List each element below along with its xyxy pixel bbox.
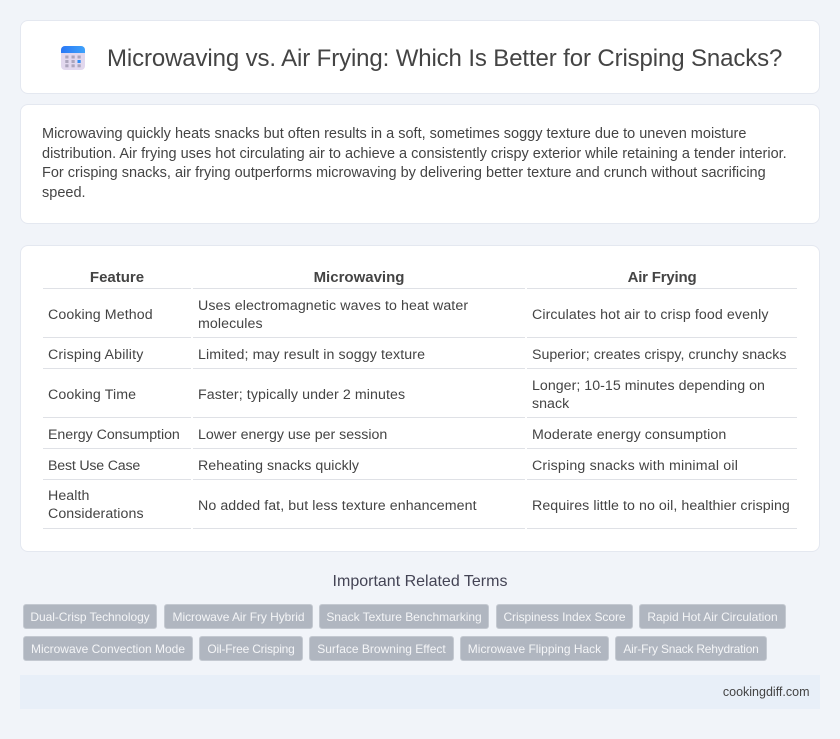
panel: title header: [20, 20, 820, 94]
text: Lower energy use per session: [198, 427, 387, 443]
text: Health: [48, 488, 89, 504]
text: Requires little to no oil, healthier crisping: [532, 498, 790, 514]
text block: description: For crisping snacks, air frying outperforms microwaving by delivering better texture and crunch without sacrificing: [42, 165, 766, 181]
text: Best Use Case: [48, 458, 140, 474]
text: Energy Consumption: [48, 427, 180, 443]
text: Reheating snacks quickly: [198, 458, 359, 474]
text: molecules: [198, 316, 263, 332]
row: Best Use Case: [48, 458, 738, 474]
text: Cooking Method: [48, 307, 153, 323]
text: Oil-Free Crisping: [207, 642, 295, 656]
text: Microwave Flipping Hack: [468, 642, 601, 656]
text: Air-Fry Snack Rehydration: [623, 642, 759, 656]
text: Rapid Hot Air Circulation: [647, 610, 778, 624]
text: Uses electromagnetic waves to heat water: [198, 298, 468, 314]
text: No added fat, but less texture enhancement: [198, 498, 477, 514]
table header: Feature: Feature: [90, 269, 144, 286]
text: Dual-Crisp Technology: [30, 610, 150, 624]
text block: description: distribution. Air frying uses hot circulating air to achieve a consistently crispy exterior while retaining a tender interior.: [42, 146, 787, 162]
text: Crisping Ability: [48, 347, 143, 363]
text: Considerations: [48, 506, 144, 522]
icon: calendar: [61, 46, 85, 70]
text: snack: [532, 396, 569, 412]
text: Crisping snacks with minimal oil: [532, 458, 738, 474]
footer bar: [20, 675, 820, 709]
row: Cooking Time: [48, 378, 765, 412]
text: Snack Texture Benchmarking: [326, 610, 482, 624]
text: Faster; typically under 2 minutes: [198, 387, 405, 403]
text: Limited; may result in soggy texture: [198, 347, 425, 363]
row: Energy Consumption: [48, 427, 726, 443]
text: Surface Browning Effect: [317, 642, 446, 656]
text: Moderate energy consumption: [532, 427, 726, 443]
footer source: cookingdiff.com: [723, 685, 810, 699]
table header: Air Frying: Air Frying: [628, 269, 696, 286]
text: Microwave Air Fry Hybrid: [173, 610, 304, 624]
text block: description: Microwaving quickly heats snacks but often results in a soft, sometimes soggy texture due to uneven moisture: [42, 126, 746, 142]
text: Longer; 10-15 minutes depending on: [532, 378, 765, 394]
table rules: [43, 288, 797, 529]
text: Cooking Time: [48, 387, 136, 403]
text: Microwave Convection Mode: [31, 642, 185, 656]
row: Health Considerations: [48, 488, 790, 522]
title: Microwaving vs. Air Frying: Which Is Better for Crisping Snacks?: [107, 45, 782, 72]
tags: related terms: [23, 604, 786, 661]
panel: description: [20, 104, 820, 224]
text: Crispiness Index Score: [503, 610, 626, 624]
row: Cooking Method: [48, 298, 769, 332]
text block: description: speed.: [42, 184, 86, 200]
text: Circulates hot air to crisp food evenly: [532, 307, 769, 323]
panel: comparison table: [20, 245, 820, 552]
text block: description: [42, 126, 787, 200]
heading: Important Related Terms: Important Related Terms: [333, 573, 507, 590]
row: Crisping Ability: [48, 347, 786, 363]
text: Superior; creates crispy, crunchy snacks: [532, 347, 786, 363]
table header: Microwaving: Microwaving: [314, 269, 404, 286]
